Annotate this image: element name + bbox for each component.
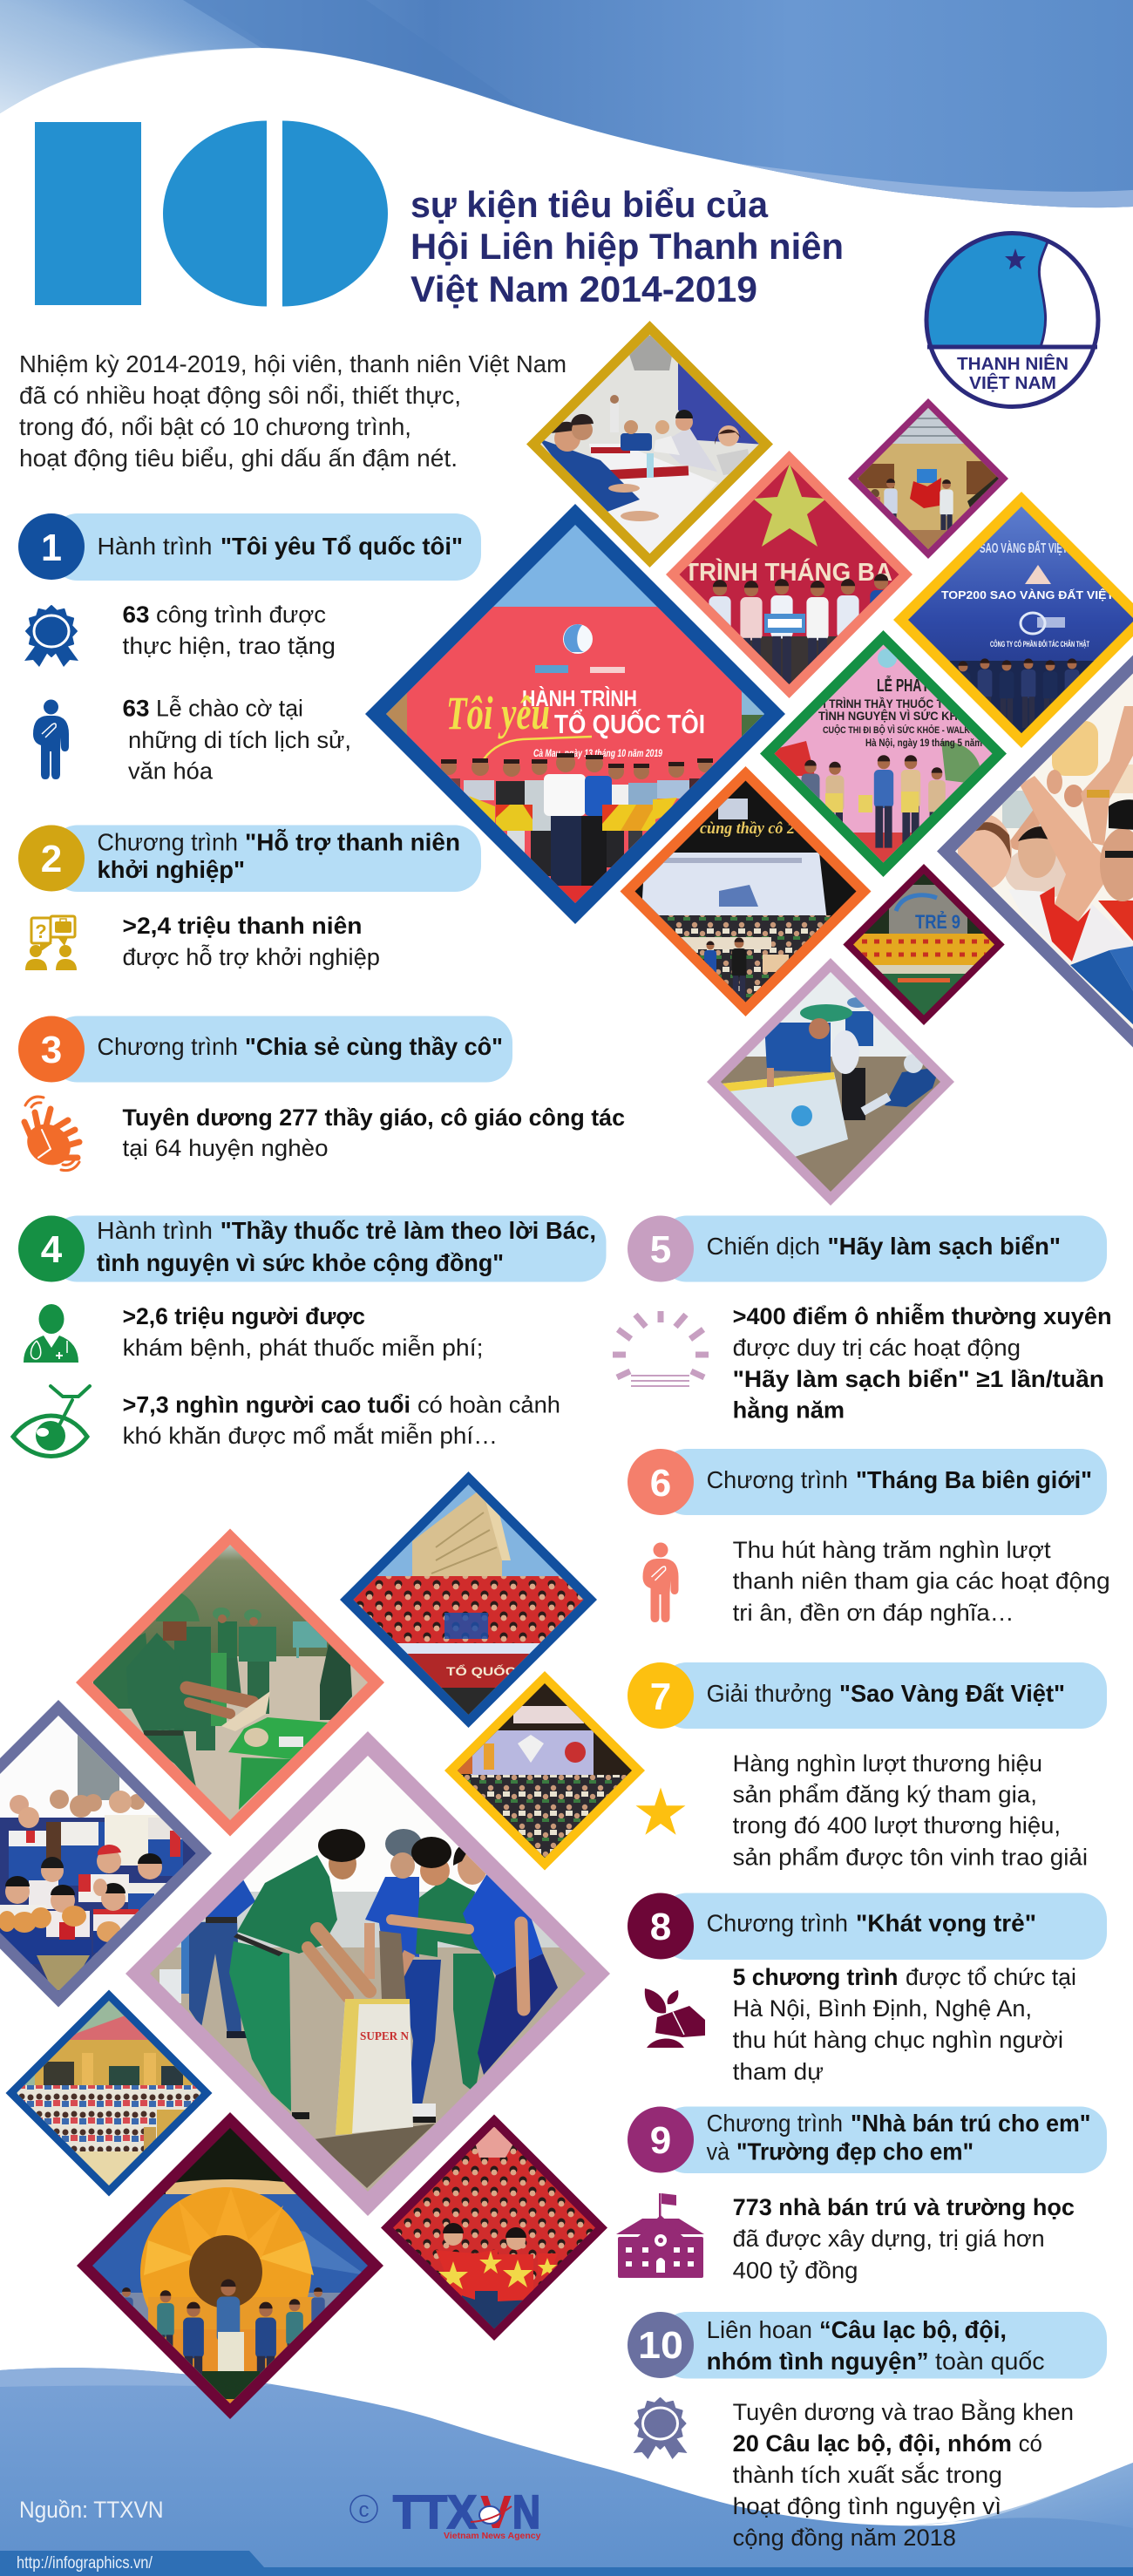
photo diamond: Hành trình Tôi yêu Tổ quốc tôi: [365, 504, 785, 924]
text: 5 chương trình: [733, 1964, 1076, 2085]
text: thu hút: thanh niên tham gia các hoạt động: [733, 1567, 1110, 1594]
section 4 header: "Thầy thuốc trẻ làm theo lời Bác,: [220, 1217, 596, 1244]
text: 63 Lễ chào cờ: [122, 694, 351, 785]
text: 63 Lễ chào cờ: những di tích lịch sử,: [128, 727, 351, 753]
logo: TTXVN: [393, 2486, 541, 2541]
text: 5 chương trình: 5 chương trình: [733, 1964, 898, 1990]
section 3 header: Chương trình: [98, 1033, 238, 1060]
photo diamond: meeting: [526, 321, 773, 568]
section 6 header: 6: [650, 1462, 671, 1505]
intro text: đã có nhiều hoạt động sôi nổi, thiết thực,: [19, 382, 461, 409]
section 8 header: [628, 1893, 1107, 1960]
section 7 header: 7: [650, 1675, 671, 1718]
section 5 header: 5: [650, 1228, 671, 1271]
icon: eye surgery: [13, 1386, 90, 1456]
section 10 header: toàn quốc: [935, 2348, 1045, 2375]
section 7 header: "Sao Vàng Đất Việt": [839, 1680, 1065, 1707]
section 9 header: Chương trình: [707, 2110, 843, 2137]
intro text: [19, 350, 566, 472]
title: sự kiện tiêu biểu của: [410, 184, 769, 225]
photo diamond: Tháng Ba banner: [666, 451, 913, 698]
photo diamond: Hành trình Tôi yêu Tổ quốc tôi: TỔ QUỐC TÔI: [554, 708, 705, 739]
green soldier in the foreground: [229, 1829, 370, 2119]
icon: ribbon: [633, 2398, 687, 2459]
section 5 header: [628, 1215, 1107, 1281]
text: 400 điểm ô nhiễm: được duy trị các hoạt động: [733, 1335, 1021, 1361]
text: 400 điểm ô nhiễm: [733, 1302, 1112, 1424]
text: 7,3 nghìn người cao tuổi: khó khăn được mổ mắt miễn phí…: [123, 1422, 498, 1449]
text: thu hút: Thu hút hàng trăm nghìn lượt: [733, 1537, 1051, 1563]
text: 5 chương trình: tham dự: [733, 2059, 824, 2085]
section 6 header: [628, 1449, 1107, 1515]
text: 773 nhà bán trú: 400 tỷ đồng: [733, 2258, 858, 2284]
section 9 header: 9: [650, 2119, 671, 2162]
photo diamond: Thầy thuốc trẻ ceremony: H TRÌNH THẦY THUỐC T: [818, 696, 943, 710]
text: 63 Lễ chào cờ: văn hóa: [128, 758, 214, 785]
text: 7,3 nghìn người cao tuổi: có hoàn cảnh: [417, 1391, 560, 1417]
section 7 header: Giải thưởng: [707, 1680, 832, 1707]
panel: section 9: [616, 2106, 1107, 2284]
photo diamond: Sao Vàng Đất Việt stage: TOP200 SAO VÀNG ĐẤT VIỆT: [941, 588, 1114, 602]
text: tuyên dương 277: [122, 1104, 625, 1161]
text: tuyên dương bằng khen: Tuyên dương và trao Bằng khen: [733, 2398, 1074, 2425]
text: 7,3 nghìn người cao tuổi: [123, 1391, 560, 1449]
section 3 header: [18, 1016, 512, 1083]
text: 63 Lễ chào cờ: Lễ chào cờ tại: [156, 694, 303, 722]
logo: Thanh Niên Việt Nam: [915, 227, 1098, 406]
section 4 header: tình nguyện vì sức khỏe cộng đồng": [97, 1249, 504, 1276]
text: 2,4 triệu thanh niên: [122, 913, 380, 970]
text: tuyên dương bằng khen: [733, 2398, 1074, 2551]
background: top wave: [0, 0, 1133, 207]
section 8 header: "Khát vọng trẻ": [856, 1910, 1036, 1937]
text: tuyên dương 277: tại 64 huyện nghèo: [122, 1135, 328, 1161]
text: 5 chương trình: được tổ chức tại: [906, 1964, 1076, 1990]
section 9 header: và: [707, 2138, 729, 2165]
website url: http://infographics.vn/: [17, 2554, 153, 2573]
text: tuyên dương bằng khen: có: [1019, 2430, 1042, 2457]
section 6 header: "Tháng Ba biên giới": [856, 1466, 1092, 1493]
text: tuyên dương bằng khen: 20 Câu lạc bộ, đội, nhóm: [733, 2430, 1012, 2457]
panel: section 1: [18, 513, 481, 785]
section 10 header: 10: [638, 2324, 683, 2367]
text: 2,6 triệu người: [123, 1303, 483, 1361]
photo diamond: monument group: [340, 1472, 597, 1728]
photo diamond: Khát vọng trẻ stage: [843, 864, 1005, 1025]
section 1 header: 1: [41, 527, 62, 569]
rubbish and sack: [336, 1931, 413, 2135]
text: tuyên dương bằng khen: cộng đồng năm 2018: [733, 2525, 956, 2551]
blue woman on the right: [391, 1845, 558, 2075]
text: 63 Lễ chào cờ: 63: [122, 696, 150, 722]
section 9 header: [628, 2106, 1107, 2173]
photo diamond: Tháng Ba banner: TRÌNH THÁNG BA: [684, 557, 892, 587]
section 6 header: Chương trình: [707, 1466, 848, 1493]
photo diamond: Chia sẻ cùng thầy cô: cùng thầy cô 2: [700, 819, 795, 838]
text: hàng nghìn lượt: [733, 1750, 1088, 1870]
text: 773 nhà bán trú: 773 nhà bán trú và trường học: [733, 2194, 1075, 2220]
text: 773 nhà bán trú: đã được xây dựng, trị giá hơn: [733, 2226, 1045, 2252]
section 2 header: 2: [41, 838, 62, 880]
photo diamond: cheering crowd: [937, 656, 1133, 1048]
text: hàng nghìn lượt: sản phẩm được tôn vinh trao giải: [733, 1844, 1088, 1870]
heading number 10: [35, 120, 388, 307]
text: 400 điểm ô nhiễm: "Hãy làm sạch biển" ≥1 lần/tuần: [733, 1366, 1104, 1392]
background: bottom wave: [0, 2368, 1133, 2576]
text: hàng nghìn lượt: Hàng nghìn lượt thương hiệu: [733, 1750, 1042, 1777]
section 9 header: "Trường đẹp cho em": [736, 2138, 974, 2165]
photo diamond: volunteers group: [0, 1700, 212, 2007]
text: tuyên dương bằng khen: hoạt động tình nguyện vì: [733, 2493, 1001, 2519]
section 2 header: khởi nghiệp": [98, 856, 245, 883]
text: 5 chương trình: thu hút hàng chục nghìn người: [733, 2027, 1063, 2053]
photo diamond: red shirts crowd: [381, 2115, 607, 2341]
photo diamond: beach clean-up with soldiers: [126, 1731, 610, 2216]
icon: doctor: [24, 1304, 78, 1363]
rubbish and sack: SUPER N: [360, 2030, 409, 2043]
section 10 header: [628, 2312, 1107, 2378]
icon: people with speech bubbles: [25, 916, 77, 970]
section 7 header: [628, 1662, 1107, 1729]
section 4 header: [18, 1215, 607, 1281]
text: tuyên dương bằng khen: thành tích xuất sắc trong: [733, 2461, 1002, 2488]
section 5 header: Chiến dịch: [707, 1233, 820, 1260]
section 3 header: 3: [41, 1029, 62, 1071]
panel: section 7: [628, 1662, 1107, 1870]
section 4 header: Hành trình: [97, 1217, 213, 1244]
text: 63 công trình: công trình được: [156, 602, 326, 628]
section 1 header: [18, 513, 481, 581]
flags held by the people: [469, 796, 677, 831]
photo diamond: Hành trình Tôi yêu Tổ quốc tôi: HÀNH TRÌNH: [522, 685, 637, 711]
photo diamond: Thầy thuốc trẻ ceremony: [760, 630, 1007, 877]
text: 63 công trình: thực hiện, trao tặng: [122, 633, 336, 659]
section 1 header: Hành trình: [98, 533, 213, 560]
photo diamond: Thầy thuốc trẻ ceremony: LỄ PHÁT: [877, 676, 929, 696]
photo diamond: Chia sẻ cùng thầy cô: [621, 766, 872, 1016]
icon: school building: [616, 2193, 704, 2278]
section 8 header: 8: [650, 1906, 671, 1948]
text: thu hút: [733, 1537, 1110, 1626]
text: 400 điểm ô nhiễm: >400 điểm ô nhiễm thường xuyên: [733, 1302, 1112, 1329]
icon: person saluting: [643, 1543, 678, 1622]
source text: Nguồn: TTXVN: [19, 2497, 164, 2523]
text: thu hút: tri ân, đền ơn đáp nghĩa…: [733, 1600, 1014, 1626]
title: Việt Nam 2014-2019: [410, 268, 757, 309]
text: tuyên dương 277: Tuyên dương 277 thầy giáo, cô giáo công tác: [122, 1104, 625, 1131]
text: 63 công trình: [122, 602, 336, 659]
text: 2,6 triệu người: >2,6 triệu người được: [123, 1303, 365, 1329]
soldier behind the sack: [403, 1837, 495, 2089]
text: 400 điểm ô nhiễm: hằng năm: [733, 1397, 845, 1424]
copyright symbol: [350, 2495, 377, 2523]
section 2 header: "Hỗ trợ thanh niên: [245, 829, 460, 856]
logo: Thanh Niên Việt Nam: THANH NIÊN: [957, 353, 1069, 374]
photo diamond: award ceremony: [444, 1671, 645, 1871]
text: 773 nhà bán trú: [733, 2194, 1075, 2284]
photo diamond: sunflower stage: [77, 2112, 383, 2419]
logo: TTXVN: TTX: [393, 2486, 477, 2539]
text: 5 chương trình: Hà Nội, Bình Định, Nghệ An,: [733, 1995, 1032, 2022]
text: hàng nghìn lượt: trong đó 400 lượt thương hiệu,: [733, 1812, 1061, 1839]
icon: star: [636, 1787, 685, 1835]
text: hàng nghìn lượt: sản phẩm đăng ký tham gia,: [733, 1782, 1037, 1808]
photo diamond: beach cleaning: [707, 958, 954, 1206]
section 5 header: "Hãy làm sạch biển": [828, 1233, 1061, 1260]
panel: section 8: [628, 1893, 1107, 2085]
people row on banner: [436, 753, 713, 886]
icon: ribbon: [24, 606, 78, 667]
panel: section 5: [613, 1215, 1112, 1424]
photo diamond: school yard: [5, 1989, 213, 2197]
photo diamond: Khát vọng trẻ stage: TRẺ 9: [915, 911, 960, 933]
section 2 header: Chương trình: [98, 829, 238, 856]
photo diamond: monument group: TỔ QUỐC: [446, 1663, 516, 1678]
section 2 header: [18, 825, 481, 892]
panel: section 4: [13, 1215, 607, 1456]
text: 2,6 triệu người: khám bệnh, phát thuốc miễn phí;: [123, 1334, 483, 1361]
icon: hand with sprout: [645, 1988, 705, 2048]
logo: TTXVN: N: [512, 2486, 540, 2539]
photo diamond: Hành trình Tôi yêu Tổ quốc tôi: Cà Mau, ngày 13 tháng 10 năm 2019: [533, 747, 662, 759]
blue woman behind the sack: [365, 1829, 441, 2123]
panel: section 2: [18, 825, 481, 970]
photo diamond: Thầy thuốc trẻ ceremony: CUỘC THI ĐI BỘ VÌ SỨC KHỎE - WALK: [823, 724, 970, 736]
icon: person saluting: [33, 699, 69, 779]
photo diamond: Thầy thuốc trẻ ceremony: TÌNH NGUYỆN VÌ SỨC KHỎ: [818, 708, 967, 723]
panel: section 3: [18, 1016, 625, 1173]
section 9 header: "Nhà bán trú cho em": [851, 2110, 1091, 2137]
copyright symbol: c: [359, 2498, 370, 2522]
section 10 header: Liên hoan: [707, 2316, 812, 2343]
panel: section 10: [628, 2312, 1107, 2551]
text: 2,4 triệu thanh niên: >2,4 triệu thanh niên: [122, 913, 363, 939]
panel: section 6: [628, 1449, 1110, 1626]
intro text: hoạt động tiêu biểu, ghi dấu ấn đậm nét.: [19, 445, 458, 472]
photo diamond: Thầy thuốc trẻ ceremony: Hà Nội, ngày 19 tháng 5 năm: [865, 737, 982, 749]
text: 2,4 triệu thanh niên: được hỗ trợ khởi nghiệp: [122, 943, 380, 970]
section 10 header: nhóm tình nguyện”: [707, 2348, 929, 2375]
intro text: trong đó, nổi bật có 10 chương trình,: [19, 413, 411, 440]
intro text: Nhiệm kỳ 2014-2019, hội viên, thanh niên Việt Nam: [19, 350, 566, 377]
photo diamond: Hành trình Tôi yêu Tổ quốc tôi: Tôi yêu: [446, 687, 550, 739]
logo: TTXVN: Vietnam News Agency: [444, 2531, 541, 2541]
text: 63 công trình: 63: [122, 602, 150, 628]
section 1 header: "Tôi yêu Tổ quốc tôi": [220, 533, 463, 560]
icon: clapping hands: [19, 1097, 79, 1173]
title: Hội Liên hiệp Thanh niên: [410, 226, 844, 267]
photo diamond: Sao Vàng Đất Việt stage: SAO VÀNG ĐẤT VIỆT: [980, 540, 1068, 556]
section 10 header: “Câu lạc bộ, đội,: [819, 2316, 1007, 2343]
text: 7,3 nghìn người cao tuổi: >7,3 nghìn người cao tuổi: [123, 1391, 410, 1417]
section 8 header: Chương trình: [707, 1910, 848, 1937]
photo diamond: Sao Vàng Đất Việt stage: [893, 492, 1133, 748]
icon: sunrise over sea: [613, 1311, 709, 1386]
logo: TTXVN: V: [480, 2486, 512, 2539]
icon: people with speech bubbles: ?: [35, 921, 47, 942]
section 3 header: "Chia sẻ cùng thầy cô": [245, 1033, 503, 1060]
section 4 header: 4: [41, 1228, 63, 1271]
photo diamond: soldiers with bins: [76, 1529, 384, 1836]
title: [410, 184, 844, 309]
logo: Thanh Niên Việt Nam: VIỆT NAM: [969, 372, 1056, 393]
photo diamond: plaque unveiling: [848, 398, 1008, 559]
